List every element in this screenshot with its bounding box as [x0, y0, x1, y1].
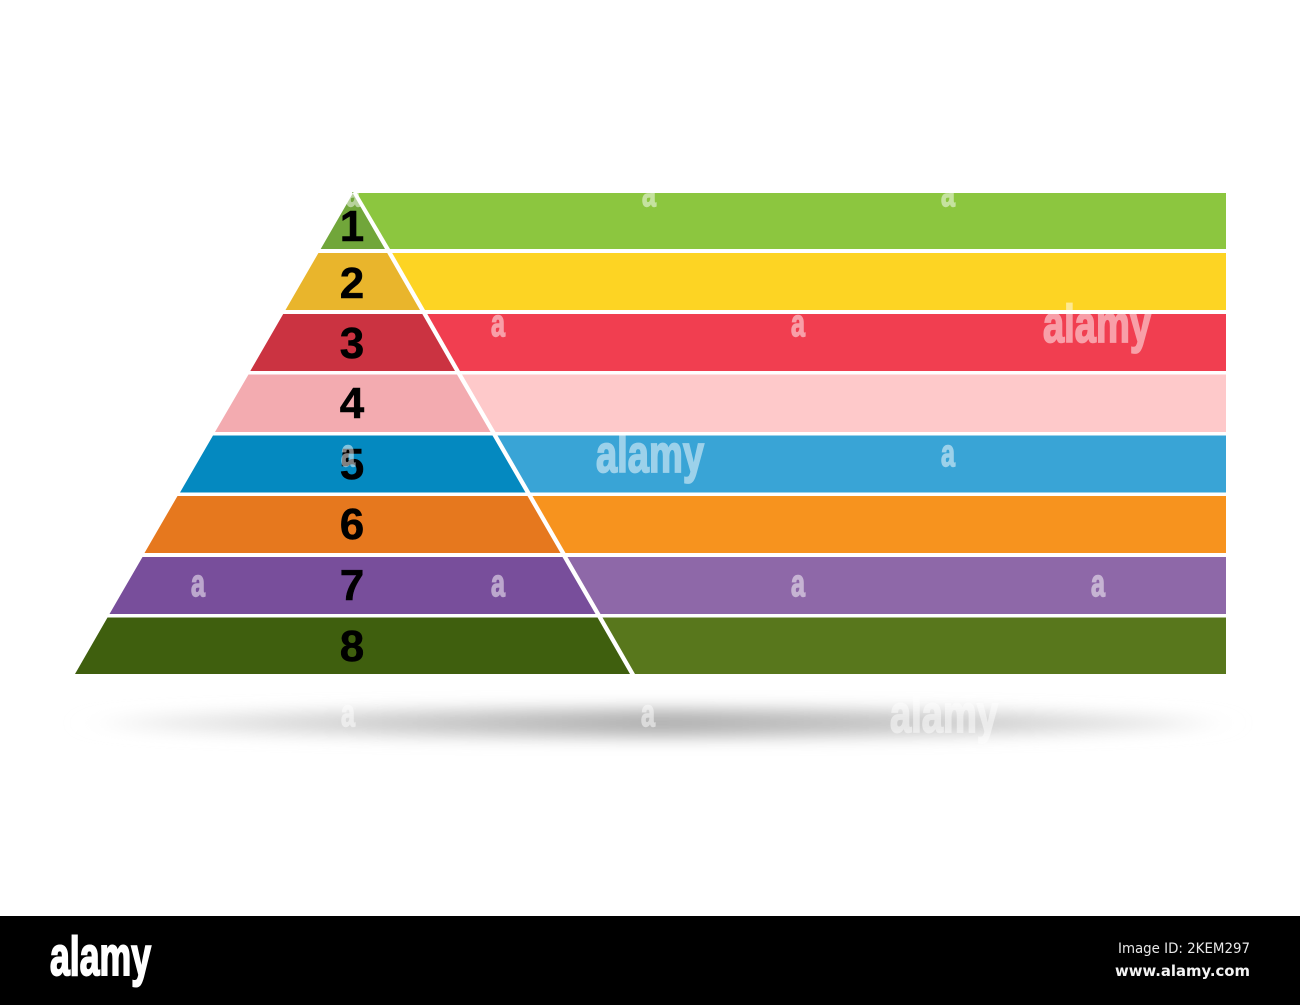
- footer bar: [0, 916, 1300, 1005]
- number 5: 5: [340, 440, 364, 489]
- bar 5: [498, 436, 1226, 492]
- bar 3: [427, 314, 1226, 371]
- watermark wordmark upper right: alamy: [1043, 295, 1151, 354]
- watermark letters: a: [346, 173, 361, 215]
- watermark letters: a: [491, 303, 506, 345]
- tier 8: [75, 618, 630, 674]
- tier 4: [215, 374, 490, 432]
- watermark wordmark on shadow: alamy: [890, 685, 998, 744]
- watermark letters: a: [341, 693, 356, 735]
- watermark letters: a: [791, 303, 806, 345]
- watermark letters: a: [341, 433, 356, 475]
- number 4: 4: [340, 379, 365, 428]
- number 7: 7: [340, 561, 364, 610]
- number 8: 8: [340, 622, 364, 671]
- website: www.alamy.com: [1115, 962, 1250, 980]
- tier 5: [180, 436, 526, 492]
- bar 2: [392, 253, 1226, 310]
- footer logo: alamy: [50, 925, 151, 987]
- watermark wordmark centre: alamy: [596, 425, 704, 484]
- watermark letters: a: [1091, 563, 1106, 605]
- horizontal bars: [357, 193, 1226, 674]
- pyramid tiers: [75, 192, 630, 674]
- number 3: 3: [340, 319, 364, 368]
- tier 7: [110, 557, 596, 614]
- ground shadow: [108, 709, 1208, 737]
- bar 4: [462, 374, 1226, 432]
- bar 1: [357, 193, 1226, 249]
- watermark letters: a: [791, 563, 806, 605]
- tier numbers: [340, 202, 365, 671]
- watermark letters: a: [491, 563, 506, 605]
- watermark letters: a: [191, 563, 206, 605]
- tier 1: [321, 192, 385, 249]
- watermark letters: a: [642, 173, 657, 215]
- number 6: 6: [340, 500, 364, 549]
- number 1: 1: [340, 202, 364, 251]
- tier 2: [286, 253, 420, 310]
- bar 6: [532, 496, 1226, 553]
- tier 3: [250, 314, 455, 371]
- footer background: [0, 916, 1300, 1005]
- watermark letters: [191, 173, 1106, 735]
- watermark letters: a: [941, 433, 956, 475]
- tier 6: [144, 496, 560, 553]
- watermark letters: a: [641, 693, 656, 735]
- watermarks: [191, 173, 1151, 744]
- bar 7: [568, 557, 1226, 614]
- bar 8: [602, 618, 1226, 674]
- image id: Image ID: 2KEM297: [1118, 941, 1250, 957]
- watermark letters: a: [941, 173, 956, 215]
- number 2: 2: [340, 259, 364, 308]
